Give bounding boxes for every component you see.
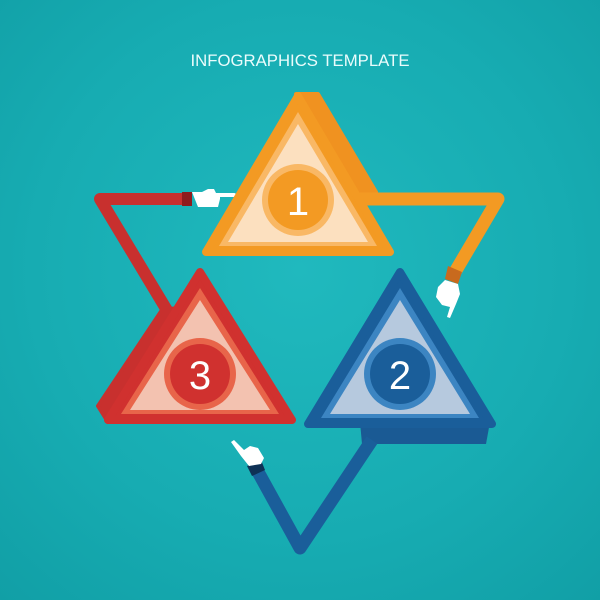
icon: hand pointing right: [192, 189, 236, 207]
arm: red (triangle 3 to triangle 1): [100, 189, 236, 312]
badge: number 1: 1: [287, 180, 309, 224]
panel: triangle 3: [98, 272, 292, 422]
badge: number 2: [364, 338, 436, 410]
badge: number 3: [164, 338, 236, 410]
icon: hand pointing up-left: [231, 440, 264, 466]
badge: number 2: 2: [389, 354, 411, 398]
badge: number 1: [262, 164, 334, 236]
title: INFOGRAPHICS TEMPLATE: [190, 52, 410, 70]
arm: orange (triangle 1 to triangle 2): [296, 94, 498, 318]
badge: number 3: 3: [189, 354, 211, 398]
arm: blue (triangle 2 to triangle 3): [231, 422, 490, 548]
panel: triangle 2: [308, 272, 492, 424]
panel: triangle 1: [206, 96, 390, 252]
icon: hand pointing down: [436, 280, 460, 318]
